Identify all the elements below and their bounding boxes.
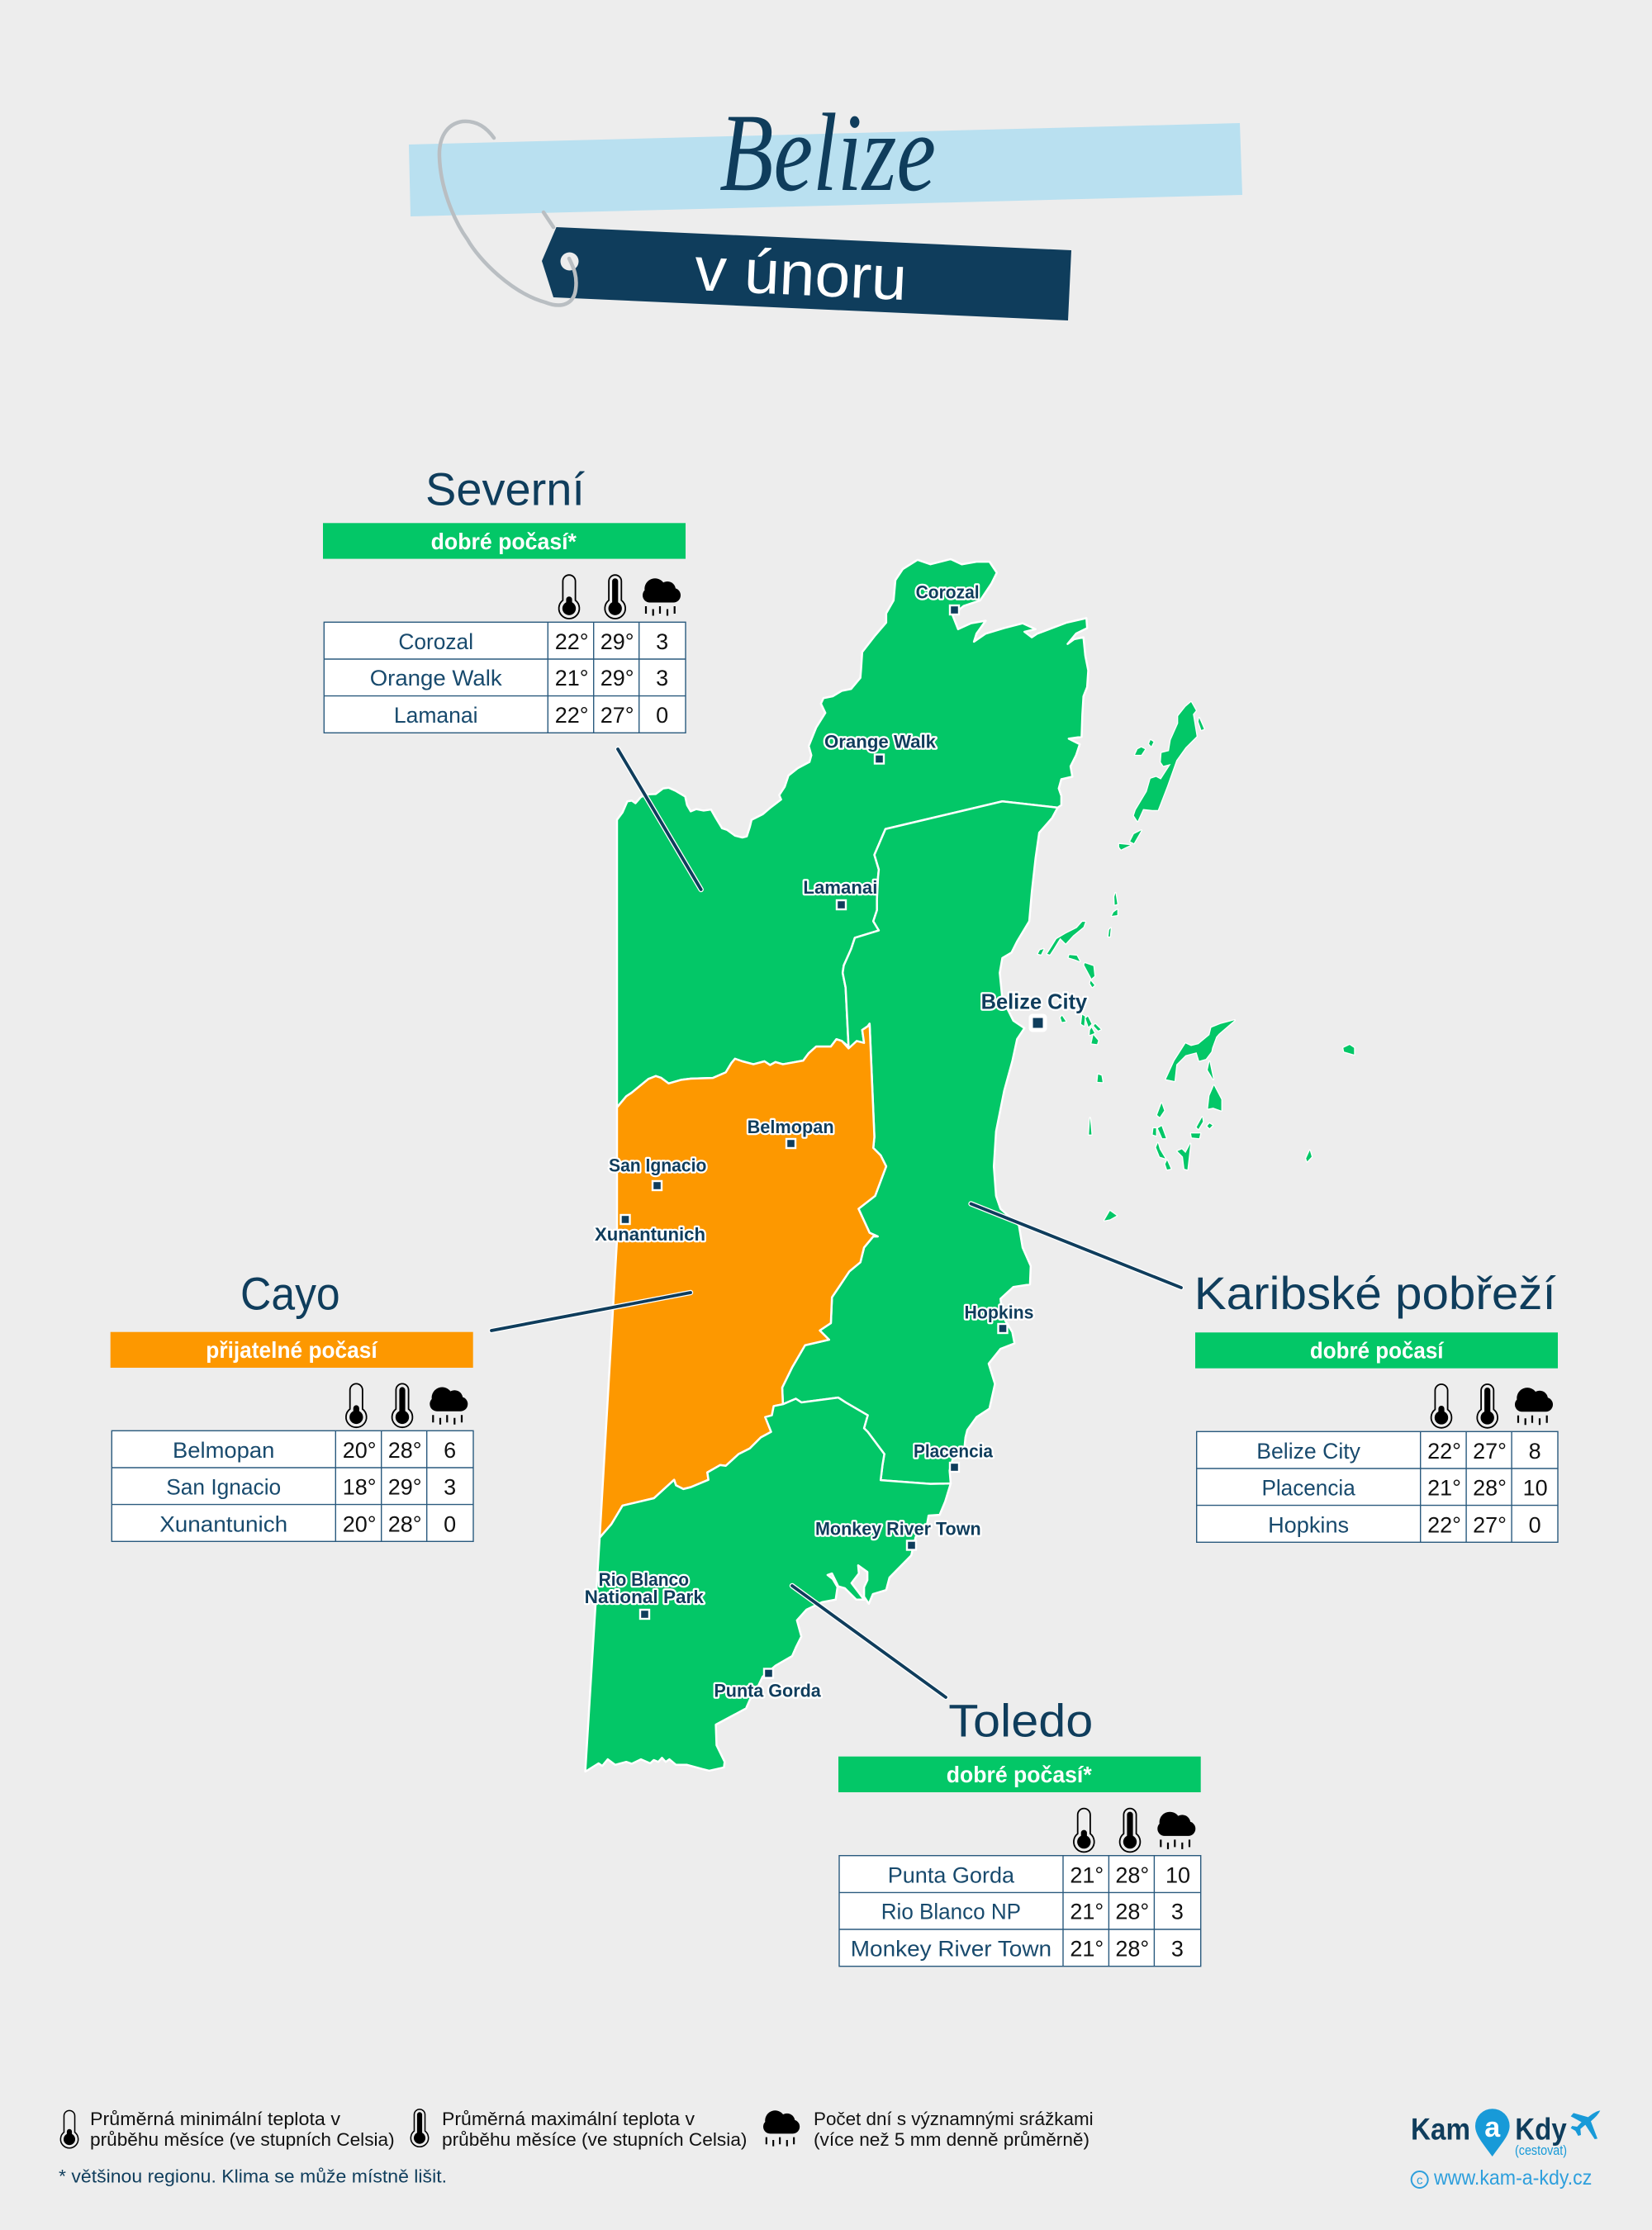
climate table: 28° xyxy=(388,1511,422,1536)
weather bar: dobré počasí xyxy=(1310,1338,1445,1364)
city labels: Corozal xyxy=(916,582,980,603)
logo word: Kdy: Kdy xyxy=(1515,2113,1567,2147)
climate table: 3 xyxy=(444,1474,456,1499)
climate table: Corozal xyxy=(398,629,473,654)
city labels: Placencia xyxy=(914,1441,994,1462)
climate table: 22° xyxy=(1427,1439,1461,1464)
title: Belize: Belize xyxy=(719,92,936,215)
city labels: Orange Walk xyxy=(824,732,937,752)
leader lines xyxy=(491,749,1181,1697)
weather bar xyxy=(838,1757,1201,1792)
website: www.kam-a-kdy.cz xyxy=(1433,2166,1592,2190)
climate table: 28° xyxy=(1115,1862,1149,1887)
climate table: 28° xyxy=(1115,1937,1149,1962)
climate table xyxy=(1197,1431,1558,1542)
region: Severní xyxy=(617,559,1089,1108)
climate table: 27° xyxy=(601,703,634,728)
climate table xyxy=(324,622,686,733)
city labels: Monkey River Town xyxy=(815,1518,981,1539)
climate table: 8 xyxy=(1529,1439,1541,1464)
website: c xyxy=(1417,2174,1423,2187)
map of Belize xyxy=(585,559,1354,1772)
tag hole xyxy=(560,253,578,271)
climate table: 3 xyxy=(656,666,668,690)
climate table: 0 xyxy=(444,1511,456,1536)
climate table: Xunantunich xyxy=(159,1511,287,1536)
city labels xyxy=(585,582,1088,1701)
climate table: 18° xyxy=(343,1474,377,1499)
climate table: 28° xyxy=(388,1438,422,1463)
city labels: Lamanai xyxy=(803,877,877,898)
climate table: 29° xyxy=(388,1474,422,1499)
city labels: Belmopan xyxy=(748,1117,834,1137)
climate table: 3 xyxy=(656,629,668,654)
legend text: minimum temperature: průběhu měsíce (ve stupních Celsia) xyxy=(90,2129,395,2150)
climate table: Punta Gorda xyxy=(888,1862,1015,1887)
subtitle: v únoru: v únoru xyxy=(693,234,909,313)
legend text: rainy days xyxy=(814,2109,1094,2150)
city labels: Xunantunich xyxy=(595,1224,705,1245)
city labels: National Park xyxy=(585,1587,705,1607)
climate table: 0 xyxy=(1529,1512,1541,1537)
heading: Severní: Severní xyxy=(425,463,585,515)
icons xyxy=(559,575,681,619)
region: Karibské pobřeží xyxy=(782,801,1057,1484)
climate table xyxy=(839,1856,1201,1967)
weather bar xyxy=(323,523,686,559)
city labels: Punta Gorda xyxy=(714,1680,822,1701)
weather bar: přijatelné počasí xyxy=(206,1337,378,1363)
climate table: 22° xyxy=(555,703,589,728)
climate table: 20° xyxy=(343,1438,377,1463)
climate table: 10 xyxy=(1165,1862,1190,1887)
icon: minimum thermometer xyxy=(60,2110,78,2148)
regions xyxy=(586,559,1089,1772)
city labels: San Ignacio xyxy=(609,1155,706,1176)
icon: rain cloud xyxy=(763,2110,800,2147)
panel: Severní xyxy=(323,463,686,733)
climate table xyxy=(112,1431,473,1541)
region: Toledo xyxy=(586,1397,951,1772)
climate table: Hopkins xyxy=(1268,1512,1349,1537)
climate table: Belize City xyxy=(1256,1439,1360,1464)
climate table: 3 xyxy=(1171,1937,1184,1962)
icons xyxy=(1431,1384,1553,1428)
climate table: 3 xyxy=(1171,1900,1184,1924)
logo word: Kam: Kam xyxy=(1411,2113,1470,2147)
legend text: minimum temperature xyxy=(90,2109,395,2150)
climate table: 21° xyxy=(1070,1900,1104,1924)
climate table: Monkey River Town xyxy=(851,1937,1051,1962)
climate table: 21° xyxy=(1070,1937,1104,1962)
heading: Toledo: Toledo xyxy=(948,1694,1093,1746)
tag string xyxy=(439,121,577,305)
weather bar xyxy=(1195,1332,1558,1369)
logo tagline: (cestovat) xyxy=(1515,2143,1567,2158)
climate table: Orange Walk xyxy=(370,666,502,690)
panel: Cayo xyxy=(111,1268,473,1541)
legend xyxy=(59,2109,1094,2187)
logo: Kam a Kdy xyxy=(1411,2109,1600,2190)
climate table: 0 xyxy=(656,703,668,728)
panel: Toledo xyxy=(838,1694,1201,1967)
cayes and islands xyxy=(1038,702,1354,1221)
city labels: Hopkins xyxy=(965,1302,1034,1322)
climate table: 29° xyxy=(601,629,634,654)
climate table: 21° xyxy=(1070,1862,1104,1887)
climate table: Lamanai xyxy=(394,703,478,728)
icon: location pin: a xyxy=(1484,2112,1501,2143)
light blue ribbon xyxy=(409,123,1242,216)
title banner xyxy=(409,92,1242,320)
legend text: maximum temperature: průběhu měsíce (ve stupních Celsia) xyxy=(442,2129,747,2150)
climate table: 22° xyxy=(1427,1512,1461,1537)
climate table: Belmopan xyxy=(173,1438,274,1463)
city markers xyxy=(621,605,1045,1678)
climate table: 10 xyxy=(1523,1475,1548,1500)
climate table: 29° xyxy=(601,666,634,690)
icon: airplane xyxy=(1571,2110,1600,2139)
climate table: 27° xyxy=(1473,1439,1507,1464)
legend text: rainy days: (více než 5 mm denně průměrně) xyxy=(814,2129,1089,2150)
icon: location pin xyxy=(1475,2109,1510,2156)
icon: maximum thermometer xyxy=(411,2109,429,2147)
footnote: * většinou regionu. Klima se může místně lišit. xyxy=(59,2166,447,2187)
climate table: San Ignacio xyxy=(166,1474,281,1499)
heading: Karibské pobřeží: Karibské pobřeží xyxy=(1194,1267,1556,1319)
legend text: maximum temperature: Průměrná maximální teplota v xyxy=(442,2109,695,2129)
weather bar: dobré počasí* xyxy=(947,1762,1092,1787)
legend text: maximum temperature xyxy=(442,2109,747,2150)
heading: Cayo: Cayo xyxy=(240,1268,340,1320)
city labels: Rio Blanco xyxy=(599,1569,689,1590)
climate table: 20° xyxy=(343,1511,377,1536)
climate table: 28° xyxy=(1473,1475,1507,1500)
icons xyxy=(346,1383,468,1427)
climate table: 28° xyxy=(1115,1900,1149,1924)
legend text: minimum temperature: Průměrná minimální teplota v xyxy=(90,2109,340,2129)
city labels: Belize City xyxy=(981,989,1088,1014)
weather bar: dobré počasí* xyxy=(431,529,577,554)
legend text: rainy days: Počet dní s významnými srážkami xyxy=(814,2109,1094,2129)
climate table: 21° xyxy=(555,666,589,690)
weather bar xyxy=(111,1332,473,1368)
climate table: 6 xyxy=(444,1438,456,1463)
climate table: 22° xyxy=(555,629,589,654)
climate table: 27° xyxy=(1473,1512,1507,1537)
climate table: Placencia xyxy=(1261,1475,1356,1500)
climate table: Rio Blanco NP xyxy=(881,1900,1021,1924)
climate table: 21° xyxy=(1427,1475,1461,1500)
region: Cayo xyxy=(600,1023,886,1538)
panel: Karibské pobřeží xyxy=(1194,1267,1558,1542)
dark luggage tag xyxy=(542,227,1071,320)
icons xyxy=(1074,1809,1195,1852)
